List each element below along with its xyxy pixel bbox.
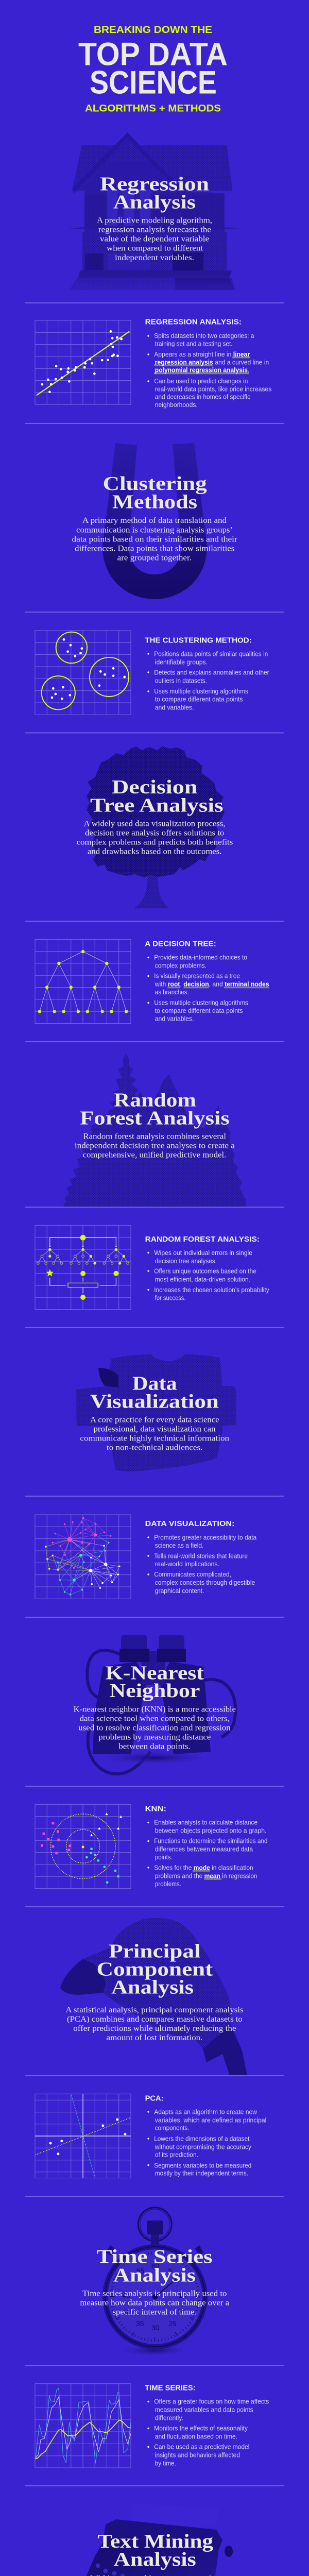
text: regression description: A predictive modeling algorithm, (97, 216, 212, 225)
icon: stopwatch: 15 (178, 2291, 186, 2299)
heading: decision tree analysis: Tree Analysis (90, 794, 224, 816)
icon: stopwatch: 5 (168, 2267, 173, 2275)
section: regression analysis (52, 132, 258, 296)
text: clustering description: data points based on their similarities and their (72, 535, 237, 544)
text: regression bullet list: training set and a testing set. (155, 341, 233, 348)
text: knn description (74, 1705, 236, 1751)
text: knn description: K-nearest neighbor (KNN) is a more accessible (74, 1705, 236, 1714)
text: time series bullet list: and fluctuation based on time. (155, 2433, 237, 2440)
text: clustering bullet list: Detects and explains anomalies and other (154, 669, 269, 676)
text: clustering bullet list: Positions data points of similar qualities in (154, 650, 268, 657)
text: random forest description: Random forest analysis combines several (83, 1132, 227, 1141)
heading: clustering methods: Clustering (103, 473, 207, 495)
text: time series bullet list: by time. (155, 2460, 176, 2467)
icon: stopwatch: 55 (136, 2267, 144, 2275)
section: time series analysis (80, 2208, 229, 2357)
heading: k-nearest neighbor (106, 1662, 204, 1702)
text: regression description: regression analysis forecasts the (98, 226, 211, 234)
main title line one: TOP DATA (78, 37, 228, 73)
text: data visualization description: professional, data visualization can (93, 1425, 216, 1434)
text: decision tree description: and drawbacks based on the outcomes. (88, 847, 221, 856)
text: decision tree bullet list: and variables. (155, 1015, 194, 1022)
heading: data visualization: Data (132, 1372, 177, 1394)
heading: data visualization (90, 1372, 219, 1413)
heading: decision tree analysis: Decision (112, 776, 197, 798)
icon: chameleon (60, 1918, 247, 2075)
heading: clustering methods: Methods (112, 492, 197, 513)
heading: time series analysis (97, 2246, 212, 2286)
text: data visualization bullet list: Promotes greater accessibility to data (154, 1534, 256, 1541)
text: decision tree description: A widely used data visualization process, (84, 819, 225, 828)
section: clustering methods (72, 443, 237, 599)
text: regression description: value of the dependent variable (100, 235, 209, 244)
text: random forest bullet list: Offers unique outcomes based on the (154, 1268, 256, 1275)
chart: three clusters (35, 631, 131, 715)
text: regression bullet list (148, 332, 271, 409)
chart: time series lines (35, 2384, 131, 2468)
text: regression description: independent variables. (115, 253, 194, 262)
text: random forest description: independent decision tree analyses to create a (75, 1142, 235, 1150)
text: regression bullet list: Can be used to predict changes in (154, 378, 248, 385)
text: time series bullet list: measured variables and data points (155, 2406, 253, 2414)
text: regression description: when compared to different (107, 244, 203, 253)
text: regression bullet list: real-world data points, like price increases (155, 385, 271, 393)
heading: time series analysis: Time Series (97, 2246, 212, 2268)
text: pca description: A statistical analysis, principal component analysis (65, 2006, 244, 2014)
text: data visualization description: to non-technical audiences. (107, 1444, 202, 1452)
text: random forest bullet list: for success. (155, 1294, 185, 1301)
text: regression bullet list: regression analysis and a curved line in (155, 359, 269, 366)
chart: regression scatter plot (35, 320, 131, 404)
text: clustering bullet list: outliers in datasets. (155, 677, 207, 684)
text: pca description: (PCA) combines and compares massive datasets to (67, 2015, 243, 2024)
subtitle: algorithms + methods: ALGORITHMS + METHODS (85, 103, 221, 114)
icon: oak tree (87, 747, 225, 908)
text: knn bullet list: problems and the mean in regression (155, 1872, 258, 1879)
text: knn bullet list: Enables analysts to calculate distance (154, 1819, 258, 1826)
panel: random forest details (35, 1225, 269, 1310)
heading: principal component analysis: Component (97, 1958, 213, 1980)
section: data visualization (76, 1354, 236, 1471)
text: random forest description: comprehensive, unified predictive model. (83, 1151, 226, 1160)
panel: pca details (35, 2094, 266, 2178)
panel: regression analysis details (35, 318, 271, 409)
section: k-nearest neighbor (74, 1635, 236, 1774)
chart: knn dotted radius plot (35, 1804, 131, 1889)
text: decision tree bullet list: with root, decision, and terminal nodes (154, 981, 269, 988)
icon: typewriter (76, 2504, 233, 2576)
heading: data visualization: Visualization (90, 1391, 219, 1413)
text: pca bullet list: variables, which are defined as principal (155, 2116, 266, 2124)
text: pca description: amount of lost information. (107, 2033, 202, 2042)
heading: k-nearest neighbor: Neighbor (109, 1680, 200, 1702)
kicker: breaking down the: BREAKING DOWN THE (94, 24, 212, 36)
text: time series bullet list: differently. (155, 2414, 183, 2421)
text: regression bullet list: Splits datasets into two categories: a (154, 332, 254, 340)
heading: principal component analysis: Principal (109, 1940, 201, 1962)
text: knn bullet list: Functions to determine the similarities and (154, 1838, 268, 1845)
text: decision tree bullet list: to compare different data points (155, 1007, 243, 1014)
text: random forest bullet list (148, 1249, 269, 1301)
heading: text mining analysis (97, 2531, 213, 2570)
text: pca bullet list: without compromising the accuracy (154, 2143, 252, 2150)
text: regression bullet list: and decreases in homes of specific (155, 394, 250, 401)
text: pca bullet list (148, 2109, 266, 2177)
panel: clustering details (35, 631, 269, 715)
text: pca description (65, 2006, 244, 2042)
icon: stopwatch: 45 (122, 2291, 130, 2299)
text: clustering bullet list: and variables. (155, 704, 194, 711)
icon: stopwatch: 25 (168, 2319, 177, 2328)
icon: stopwatch: 30 (151, 2324, 159, 2332)
text: clustering bullet list: to compare different data points (155, 696, 243, 703)
text: pca bullet list: Adapts as an algorithm to create new (154, 2109, 258, 2116)
text: clustering description: A primary method of data translation and (82, 516, 227, 525)
text: pca bullet list: mostly by their independent terms. (155, 2170, 248, 2177)
text: decision tree description: complex problems and predicts both benefits (76, 838, 233, 846)
heading: knn panel: KNN: (145, 1805, 166, 1813)
text: random forest description (75, 1132, 235, 1160)
text: random forest bullet list: decision tree analyses. (155, 1258, 217, 1265)
icon: horseshoe magnet (102, 443, 207, 599)
text: clustering bullet list (148, 650, 269, 711)
icon: house illustration (52, 132, 258, 296)
text: clustering bullet list: identifiable groups. (155, 658, 208, 666)
icon: stopwatch: 40 (123, 2308, 131, 2316)
section: principal component analysis (60, 1918, 247, 2075)
section: random forest analysis (63, 1054, 246, 1207)
text: time series description: measure how data points can change over a (80, 2299, 229, 2308)
text: knn bullet list: problems. (155, 1880, 181, 1888)
chart: random forest voting diagram (35, 1225, 131, 1310)
text: pca description: offer predictions while ultimately reducing the (73, 2024, 236, 2033)
text: clustering description: differences. Data points that show similarities (75, 544, 234, 553)
heading: principal component analysis (97, 1940, 213, 1998)
text: time series bullet list: insights and behaviors affected (155, 2452, 240, 2459)
heading: regression analysis (100, 173, 209, 213)
text: decision tree bullet list: as branches. (155, 989, 189, 996)
text: knn description: problems by measuring distance (98, 1733, 211, 1742)
text: time series bullet list (148, 2398, 269, 2467)
header title block (78, 24, 228, 114)
text: regression bullet list: polynomial regression analysis. (155, 367, 249, 374)
text: random forest bullet list: Increases the chosen solution’s probability (154, 1286, 269, 1294)
text: data visualization bullet list: science as a field. (155, 1542, 203, 1549)
text: time series bullet list: Offers a greater focus on how time affects (154, 2398, 269, 2405)
text: knn description: between data points. (118, 1742, 191, 1751)
heading: principal component analysis: Analysis (111, 1976, 194, 1998)
heading: pca panel: PCA: (145, 2095, 164, 2103)
text: clustering bullet list: Uses multiple clustering algorithms (154, 688, 248, 695)
text: time series bullet list: Can be used as a predictive model (154, 2444, 249, 2451)
text: random forest bullet list: most efficient, data-driven solution. (155, 1276, 250, 1283)
heading: text mining analysis: Text Mining (97, 2531, 213, 2552)
heading: clustering methods (103, 473, 207, 513)
text: time series description (80, 2290, 229, 2317)
text: knn bullet list: differences between measured data (155, 1845, 253, 1853)
heading: time series panel: TIME SERIES: (145, 2384, 196, 2393)
heading: time series analysis: Analysis (113, 2264, 196, 2286)
icon: stereoscope viewer (76, 1354, 236, 1471)
heading: random forest analysis: Random (114, 1089, 196, 1111)
text: knn description: data science tool when compared to others, (80, 1715, 230, 1723)
text: clustering description: communication is clustering analysis groups’ (76, 526, 233, 534)
panel: decision tree details (35, 939, 269, 1024)
panel: data visualization details (35, 1515, 256, 1599)
text: data visualization description: communicate highly technical information (80, 1434, 229, 1443)
text: decision tree description: decision tree analysis offers solutions to (85, 828, 225, 837)
text: data visualization description (80, 1416, 229, 1452)
panel: knn details (35, 1804, 268, 1889)
text: data visualization bullet list: complex concepts through digestible (155, 1579, 255, 1586)
heading: clustering panel: THE CLUSTERING METHOD: (145, 636, 252, 645)
icon: conifer forest (63, 1054, 246, 1207)
text: time series bullet list: Monitors the effects of seasonality (154, 2425, 248, 2432)
text: regression description (97, 216, 212, 262)
heading: decision tree analysis (90, 776, 224, 816)
text: knn description: used to resolve classification and regression (78, 1724, 231, 1733)
text: data visualization bullet list: real-world implications. (155, 1561, 219, 1568)
text: pca bullet list: Segments variables to be measured (154, 2162, 251, 2169)
heading: regression analysis: Regression (100, 173, 209, 195)
text: knn bullet list: points. (155, 1854, 173, 1861)
text: data visualization bullet list: Tells real-world stories that feature (154, 1552, 248, 1560)
section: decision tree analysis (76, 747, 233, 908)
heading: text mining analysis: Analysis (114, 2549, 196, 2570)
heading: random forest panel: RANDOM FOREST ANALYSIS: (145, 1235, 260, 1244)
text: data visualization description: A core practice for every data science (90, 1416, 219, 1425)
section: text mining analysis (73, 2504, 237, 2576)
text: decision tree bullet list: Is visually represented as a tree (154, 973, 240, 980)
main title line two: SCIENCE (90, 65, 217, 101)
chart: network graph (35, 1515, 131, 1599)
text: pca bullet list: components. (155, 2125, 189, 2132)
text: regression bullet list: neighborhoods. (155, 401, 198, 409)
text: data visualization bullet list (148, 1534, 256, 1595)
text: pca bullet list: Lowers the dimensions of a dataset (154, 2136, 250, 2143)
heading: k-nearest neighbor: K-Nearest (106, 1662, 204, 1684)
icon: stopwatch: 35 (136, 2319, 144, 2328)
icon: stopwatch: 20 (177, 2308, 185, 2316)
text: data visualization bullet list: graphical content. (155, 1587, 204, 1595)
text: knn bullet list: between objects projected onto a graph. (155, 1827, 266, 1834)
heading: random forest analysis (80, 1089, 230, 1129)
text: regression bullet list: Appears as a straight line in linear (154, 351, 250, 358)
heading: random forest analysis: Forest Analysis (80, 1107, 230, 1129)
text: time series description: Time series analysis is principally used to (82, 2290, 227, 2298)
text: pca bullet list: of its prediction. (155, 2151, 198, 2159)
text: knn bullet list: Solves for the mode in classification (154, 1864, 253, 1871)
icon: binoculars (87, 1635, 235, 1774)
heading: regression analysis: Analysis (113, 191, 196, 213)
text: decision tree bullet list: complex problems. (155, 962, 207, 970)
text: decision tree bullet list: Uses multiple clustering algorithms (154, 999, 248, 1007)
text: data visualization bullet list: Communicates complicated, (154, 1571, 231, 1578)
text: clustering description: are grouped together. (117, 553, 192, 562)
panel: time series details (35, 2384, 269, 2468)
icon: stopwatch: 60 (151, 2262, 159, 2270)
text: decision tree bullet list (148, 954, 269, 1022)
heading: regression panel: REGRESSION ANALYSIS: (145, 318, 242, 326)
heading: data visualization panel: DATA VISUALIZATION: (145, 1520, 234, 1528)
chart: decision tree diagram (35, 939, 131, 1024)
text: clustering description (72, 516, 237, 562)
text: time series description: specific interval of time. (112, 2308, 197, 2317)
text: decision tree bullet list: Provides data-informed choices to (154, 954, 247, 961)
text: decision tree description (76, 819, 233, 856)
text: knn bullet list (148, 1819, 268, 1888)
chart: principal component axes (35, 2094, 131, 2178)
text: random forest bullet list: Wipes out individual errors in single (154, 1249, 252, 1257)
heading: decision tree panel: A DECISION TREE: (145, 940, 216, 948)
icon: stopwatch (102, 2208, 208, 2357)
